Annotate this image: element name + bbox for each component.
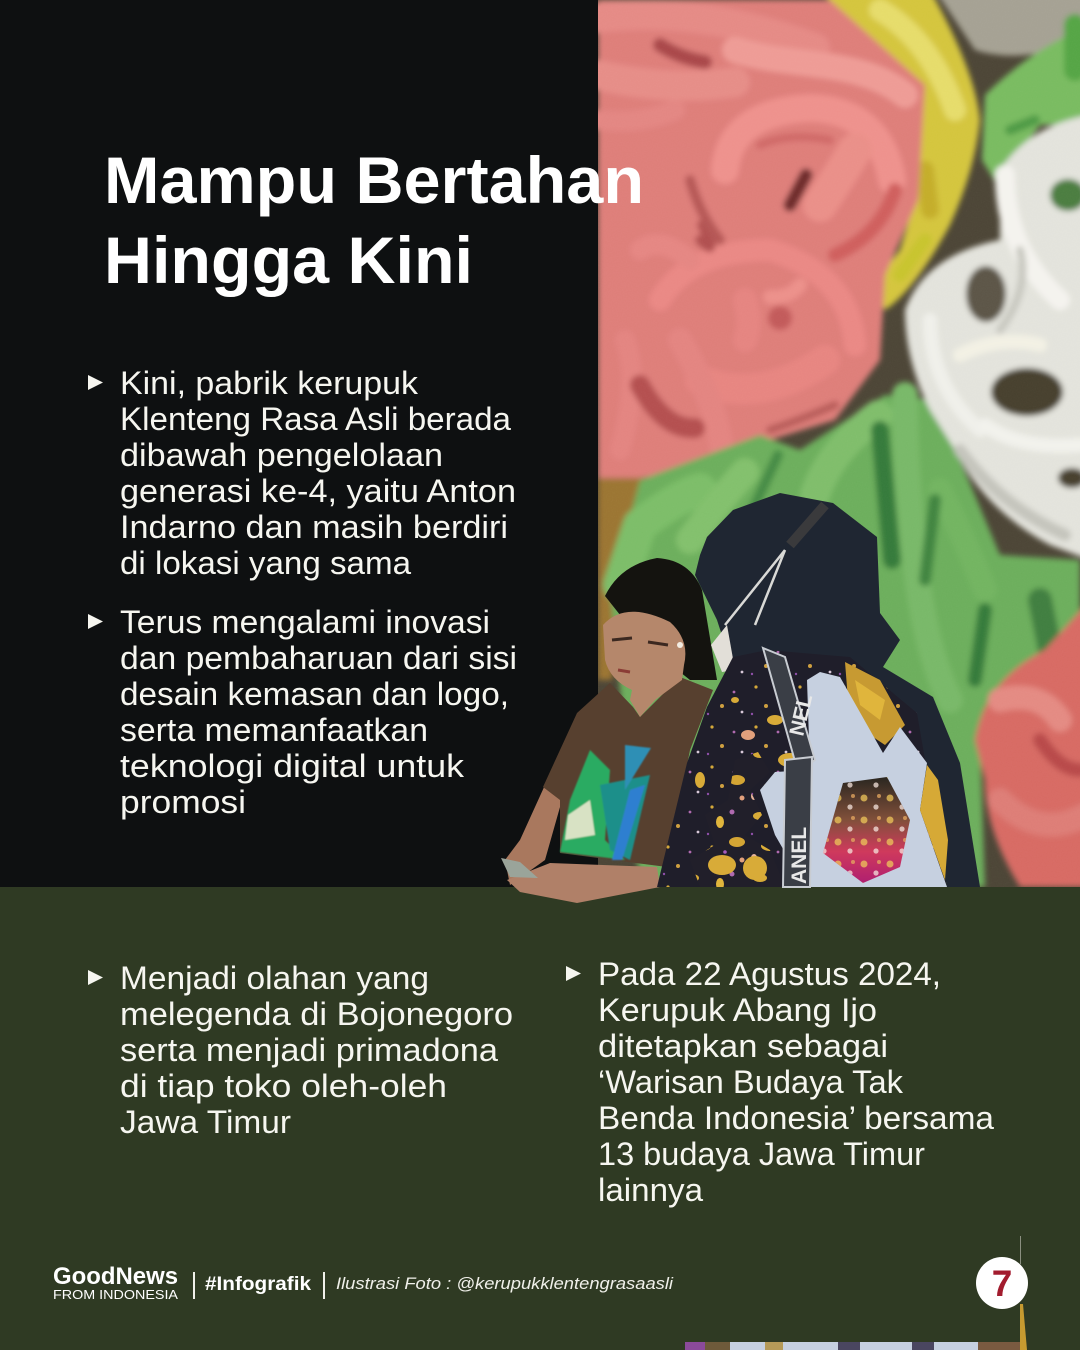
green cracker top right [982, 25, 1080, 190]
title: Mampu Bertahan [104, 143, 644, 217]
page number [976, 1257, 1028, 1309]
text: fourth point: 13 budaya Jawa Timur [598, 1136, 925, 1172]
bullet block: warisan budaya [566, 956, 994, 1208]
pretzel shading [1005, 175, 1060, 300]
hair [605, 558, 717, 680]
panel: olive bottom background [0, 887, 1080, 1350]
bag strap: NEL [785, 692, 817, 738]
shirt [543, 677, 713, 867]
text: second point: promosi [120, 784, 246, 820]
batik top [657, 650, 947, 887]
mask strap [725, 550, 785, 625]
pink cracker bottom right [975, 600, 1080, 887]
text: first point: Kini, pabrik kerupuk [120, 365, 419, 401]
hexagon patch [823, 777, 910, 883]
text: second point: Terus mengalami inovasi [120, 604, 490, 640]
text: first point: dibawah pengelolaan [120, 437, 443, 473]
text: first point: generasi ke-4, yaitu Anton [120, 473, 516, 509]
pink base mass [598, 0, 925, 480]
text: second point: teknologi digital untuk [120, 748, 465, 784]
photo: woman with hair bun seen from the front [501, 558, 717, 903]
photo: colourful kerupuk crackers [598, 0, 1080, 887]
text: second point: dan pembaharuan dari sisi [120, 640, 517, 676]
banknotes [501, 858, 538, 878]
mask [711, 625, 735, 672]
arm [505, 785, 562, 885]
icon: bullet triangle [88, 614, 103, 629]
yellow cracker [820, 0, 980, 310]
side patch [920, 765, 948, 880]
bullet block: inovasi [88, 604, 517, 820]
text: first point: Indarno dan masih berdiri [120, 509, 508, 545]
footer [53, 1236, 1028, 1350]
text: first point: Klenteng Rasa Asli berada [120, 401, 511, 437]
white pretzel cracker [905, 115, 1080, 560]
pink highlights [598, 15, 815, 48]
cropped photo strip at the bottom [685, 1304, 1027, 1350]
tan base strip [598, 478, 645, 680]
photo: woman in hijab seen from the back [657, 493, 980, 887]
panel: dark top background [0, 0, 600, 887]
text: first point: di lokasi yang sama [120, 545, 411, 581]
yellow batik splashes [690, 662, 905, 887]
bag strap: ANEL [788, 827, 811, 884]
page number: 7 [992, 1263, 1012, 1304]
icon: bullet triangle [566, 966, 581, 981]
icon: bullet triangle [88, 375, 103, 390]
title: Hingga Kini [104, 223, 473, 297]
text: fourth point: Pada 22 Agustus 2024, [598, 956, 941, 992]
text: third point: di tiap toko oleh-oleh [120, 1068, 447, 1104]
face and neck [603, 612, 685, 717]
hashtag: #Infografik [205, 1274, 311, 1295]
green cracker base [610, 395, 1080, 887]
shirt graphic [560, 745, 651, 860]
text: third point: melegenda di Bojonegoro [120, 996, 513, 1032]
text: second point [120, 604, 517, 820]
logo: GoodNews from Indonesia [53, 1263, 179, 1302]
gray cracker top right [935, 0, 1080, 56]
text: fourth point: ‘Warisan Budaya Tak [598, 1064, 904, 1100]
text: second point: desain kemasan dan logo, [120, 676, 509, 712]
hijab [695, 493, 980, 887]
logo: GoodNews from Indonesia: FROM INDONESIA [53, 1288, 179, 1302]
bullet block: generasi ke-4 [88, 365, 516, 581]
title [104, 143, 644, 297]
logo: GoodNews from Indonesia: GoodNews [53, 1263, 178, 1290]
text: third point [120, 960, 513, 1140]
icon: bullet triangle [88, 970, 103, 985]
lower hand [507, 863, 660, 903]
pink shadows [660, 45, 705, 62]
text: fourth point: Benda Indonesia’ bersama [598, 1100, 994, 1136]
text: third point: Jawa Timur [120, 1104, 291, 1140]
text: fourth point [598, 956, 994, 1208]
text: fourth point: ditetapkan sebagai [598, 1028, 888, 1064]
holes in pretzel [966, 266, 1006, 322]
pale panels [760, 672, 947, 887]
text: fourth point: lainnya [598, 1172, 703, 1208]
text: third point: serta menjadi primadona [120, 1032, 498, 1068]
text: third point: Menjadi olahan yang [120, 960, 429, 996]
bullet block: melegenda [88, 960, 513, 1140]
text: fourth point: Kerupuk Abang Ijo [598, 992, 877, 1028]
text: first point [120, 365, 516, 581]
bag strap [763, 648, 817, 887]
text: second point: serta memanfaatkan [120, 712, 428, 748]
photo credit: Ilustrasi Foto : @kerupukklentengrasaasli [336, 1274, 674, 1293]
